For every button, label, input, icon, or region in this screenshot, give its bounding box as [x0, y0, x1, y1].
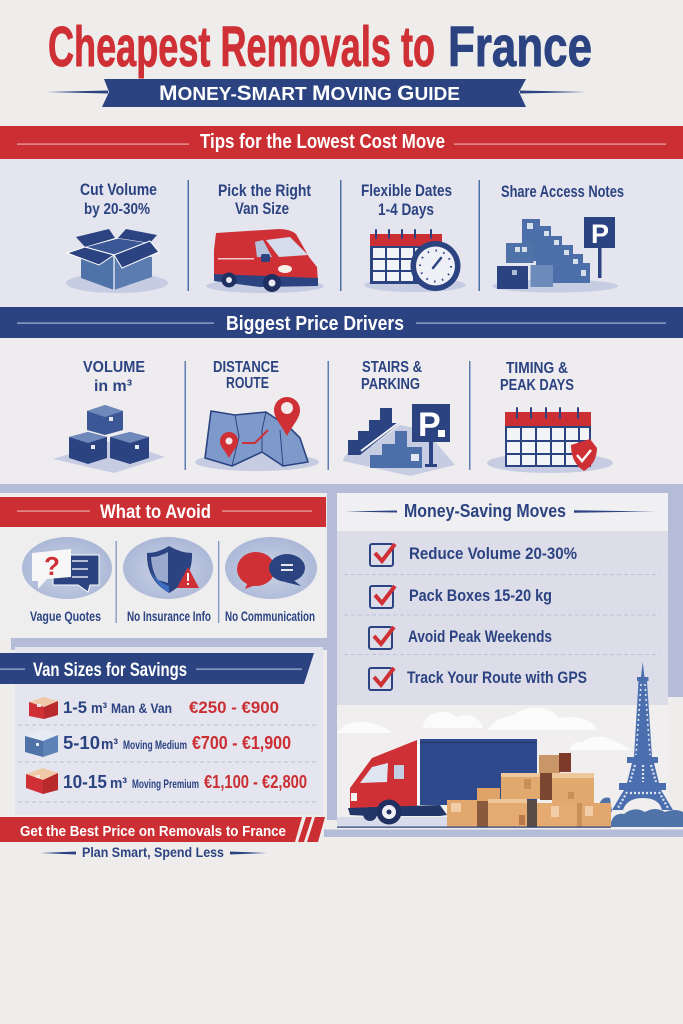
- item: avoid peak weekends: [369, 627, 552, 649]
- row: 10-15 m3: 10-15: [63, 772, 107, 792]
- driver: distance route: ROUTE: [226, 375, 269, 392]
- driver: volume: in m³: [94, 378, 132, 395]
- driver: volume: VOLUME: [83, 359, 145, 376]
- heading band: tips: Tips for the Lowest Cost Move: [200, 131, 445, 153]
- icon: two speech bubbles: [225, 537, 317, 599]
- row: 1-5 m3: m³: [91, 700, 107, 717]
- icon: medium blue box: [25, 729, 58, 757]
- row: 5-10 m3: m³: [101, 736, 118, 753]
- item: vague quotes: [22, 537, 112, 624]
- driver: stairs and parking: [343, 359, 455, 476]
- footer tagline: Plan Smart, Spend Less: [82, 845, 224, 860]
- item: no insurance info: No Insurance Info: [127, 609, 211, 624]
- tip: cut volume: [66, 181, 168, 293]
- heading band: van sizes: [0, 653, 314, 684]
- driver: volume: [53, 359, 165, 473]
- heading band: van sizes: Van Sizes for Savings: [33, 660, 187, 681]
- background strips: [0, 484, 683, 820]
- icon: map with pins: [195, 397, 319, 471]
- item: pack boxes: Pack Boxes 15-20 kg: [409, 587, 552, 605]
- item: track route: Track Your Route with GPS: [407, 669, 587, 687]
- item: track route: [369, 668, 587, 690]
- icon: boxes, stairs and parking sign: P: [591, 219, 609, 249]
- heading band: tips: [0, 126, 683, 159]
- row: 10-15 m3: Moving Premium: [132, 779, 199, 791]
- heading band: drivers: Biggest Price Drivers: [226, 313, 404, 335]
- icon: checkbox: [370, 586, 395, 608]
- item: vague quotes: Vague Quotes: [30, 609, 101, 624]
- row: 10-15 m3: [26, 768, 307, 794]
- icon: checkbox: [369, 668, 394, 690]
- panel: biggest price drivers: [0, 307, 683, 484]
- icon: open box: [66, 229, 168, 293]
- footer call to action banner: Get the Best Price on Removals to France: [20, 823, 286, 840]
- icon: shield with warning: [123, 537, 213, 599]
- item: avoid peak weekends: Avoid Peak Weekends: [408, 628, 552, 646]
- row: 10-15 m3: €1,100 - €2,800: [204, 772, 307, 792]
- item: no communication: No Communication: [225, 609, 315, 624]
- item: reduce volume: Reduce Volume 20-30%: [409, 545, 577, 563]
- driver: timing and peak days: TIMING &: [506, 360, 568, 377]
- bottom strip: [324, 830, 683, 837]
- row: 5-10 m3: Moving Medium: [123, 740, 187, 752]
- truck: [348, 739, 537, 824]
- tip: flexible dates: [361, 182, 466, 292]
- icon: red box: [26, 768, 58, 794]
- icon: red van: [206, 229, 324, 293]
- ground line: [337, 826, 611, 828]
- tip: cut volume: by 20-30%: [84, 201, 150, 218]
- row: 1-5 m3: Man & Van: [111, 701, 172, 716]
- ground: [337, 817, 449, 827]
- item: reduce volume: [370, 544, 577, 566]
- tip: share access notes: [492, 183, 624, 292]
- row: 10-15 m3: m³: [110, 775, 127, 792]
- tip: van size: Van Size: [235, 200, 289, 218]
- driver: timing and peak days: [487, 360, 613, 473]
- driver: distance route: [195, 359, 319, 471]
- heading band: avoid: [0, 497, 326, 527]
- item: pack boxes: [370, 586, 552, 608]
- tip: cut volume: Cut Volume: [80, 181, 157, 199]
- icon: small red box: [29, 697, 58, 719]
- panel: what to avoid: [0, 497, 327, 638]
- row: 5-10 m3: €700 - €1,900: [192, 733, 291, 753]
- panel: money-saving moves: [337, 493, 668, 705]
- row: 5-10 m3: [25, 729, 291, 757]
- Eiffel Tower: [598, 662, 683, 827]
- driver: stairs and parking: STAIRS &: [362, 359, 422, 376]
- heading band: drivers: [0, 307, 683, 338]
- footer call to action banner: [0, 817, 325, 842]
- icon: calendar and clock: [364, 230, 466, 292]
- tip: flexible dates: Flexible Dates: [361, 182, 452, 200]
- subtitle ribbon: [47, 79, 586, 107]
- driver: distance route: DISTANCE: [213, 359, 279, 376]
- tip: flexible dates: 1-4 Days: [378, 201, 434, 219]
- boxes: [447, 753, 611, 827]
- icon: checkbox: [370, 544, 395, 566]
- icon: speech bubbles with question mark: ?: [44, 551, 60, 581]
- icon: calendar with shield: [487, 408, 613, 473]
- row: 1-5 m3: 1-5: [63, 698, 87, 717]
- footer tagline: [40, 845, 267, 860]
- icon: cubes: [53, 405, 165, 473]
- clouds: [337, 708, 632, 750]
- row: 5-10 m3: 5-10: [63, 733, 100, 753]
- row: 1-5 m3: €250 - €900: [189, 698, 279, 717]
- row: 1-5 m3: [29, 697, 279, 719]
- driver: stairs and parking: PARKING: [361, 376, 420, 393]
- item: no communication: [225, 537, 317, 624]
- item: no insurance info: [123, 537, 213, 624]
- subtitle ribbon: MONEY-SMART MOVING GUIDE: [159, 82, 460, 105]
- tip: van size: Pick the Right: [218, 182, 311, 200]
- title: Cheapest Removals to: [48, 15, 435, 79]
- panel: van sizes for savings: [0, 647, 323, 815]
- icon: stairs and parking sign: P: [418, 406, 441, 444]
- driver: timing and peak days: PEAK DAYS: [500, 377, 574, 394]
- icon: checkbox: [369, 627, 394, 649]
- panel: tips for the lowest cost move: [0, 126, 683, 307]
- heading: money-saving moves: Money-Saving Moves: [404, 501, 566, 521]
- tip: share access notes: Share Access Notes: [501, 183, 624, 201]
- heading band: avoid: What to Avoid: [100, 502, 211, 523]
- tip: van size: [206, 182, 324, 293]
- title: France: [448, 15, 592, 79]
- illustration: truck, boxes and Eiffel Tower: [337, 662, 683, 830]
